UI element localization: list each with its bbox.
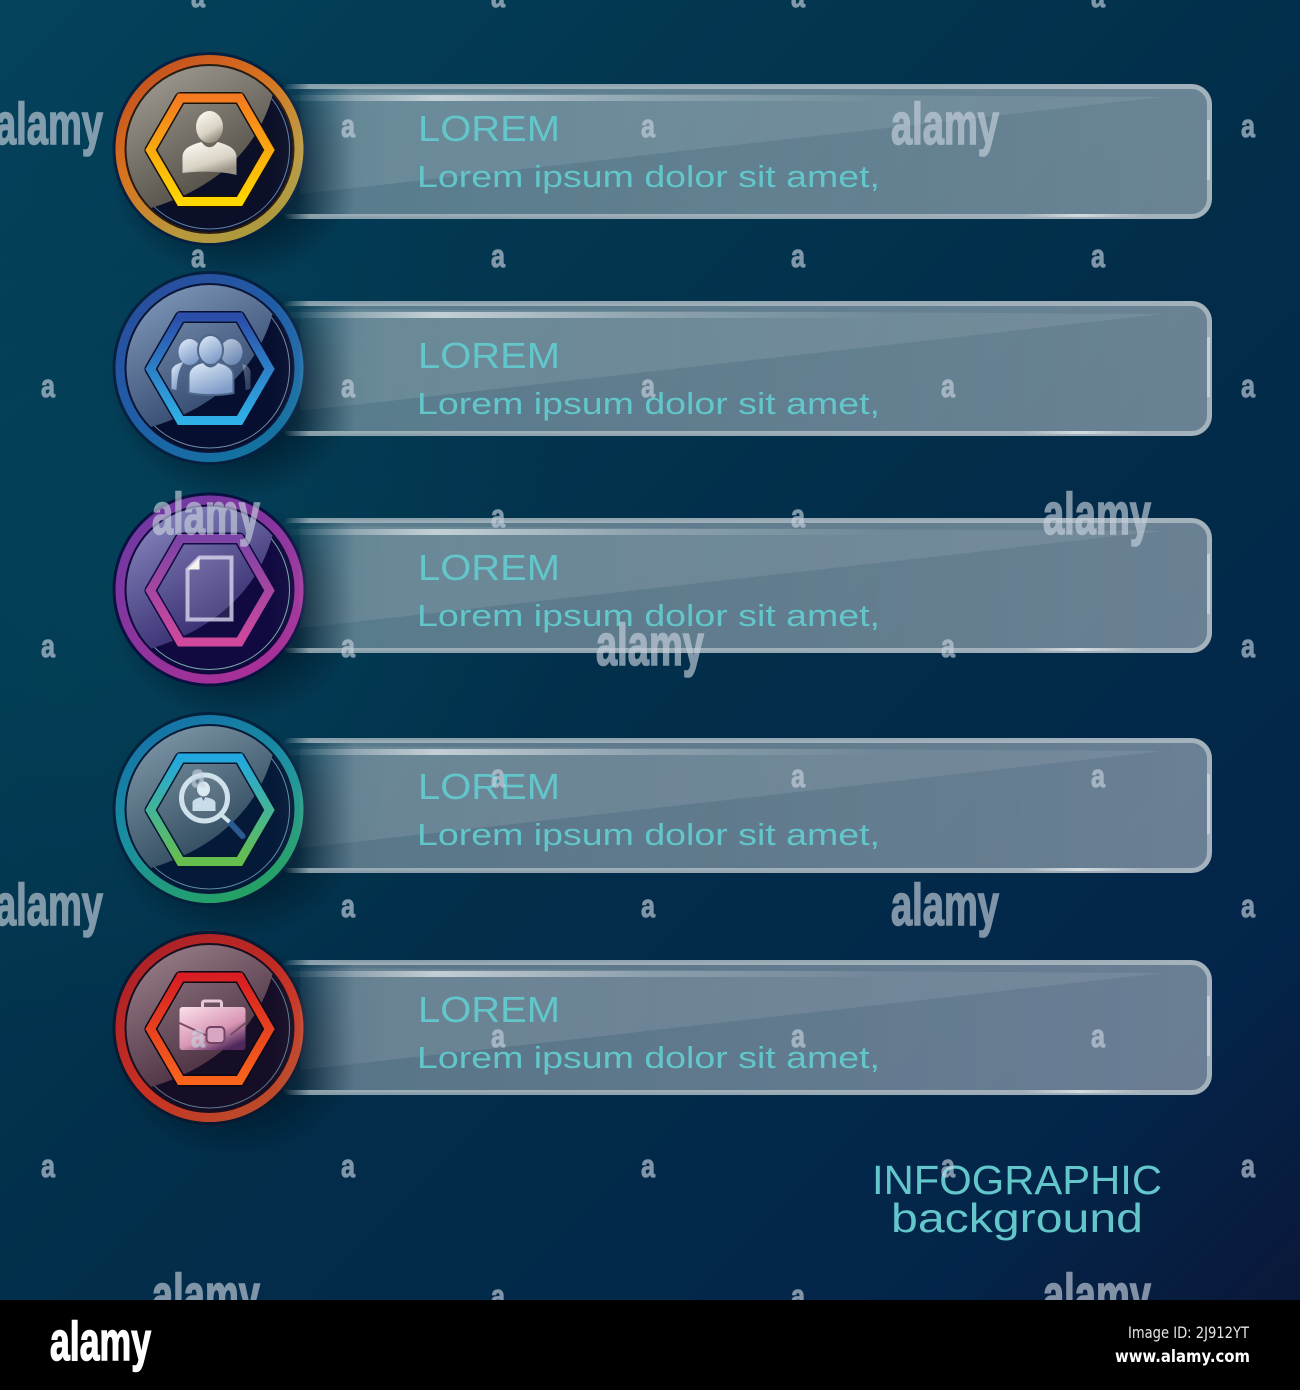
watermarks: a [341,1148,355,1184]
text 1: Lorem ipsum dolor sit amet, [417,159,880,194]
watermarks: a [341,368,355,404]
text 4: Lorem ipsum dolor sit amet, [417,817,880,852]
watermarks: alamy [152,482,260,547]
panel 4 [270,740,1210,871]
heading 3: LOREM [418,547,560,588]
image id: Image ID: 2J912YT [1128,1323,1249,1342]
heading 1: LOREM [418,108,560,149]
watermarks: a [791,1278,805,1314]
watermarks: a [491,1018,505,1054]
panel 3 [270,520,1210,651]
watermarks: a [641,1148,655,1184]
watermarks: a [641,888,655,924]
watermarks: alamy [891,873,999,938]
text 3: Lorem ipsum dolor sit amet, [417,598,880,633]
watermarks: a [641,368,655,404]
panel 2 [270,304,1210,434]
watermarks: a [941,368,955,404]
watermarks: alamy [596,613,704,678]
watermarks: a [191,758,205,794]
badge: document icon [112,492,306,686]
watermarks: a [491,1278,505,1314]
watermarks: a [1241,108,1255,144]
row 2: group [110,271,1210,499]
watermarks: a [791,498,805,534]
watermarks: a [1091,238,1105,274]
watermarks: a [791,238,805,274]
badge: group icon [112,271,306,465]
panel 1 [270,86,1210,217]
watermarks: a [341,628,355,664]
watermarks: a [491,498,505,534]
watermarks: alamy [1043,482,1151,547]
row 4: search user [110,712,1210,940]
watermarks: a [941,1148,955,1184]
badge: briefcase icon [112,931,306,1125]
watermarks: a [41,368,55,404]
watermarks: a [191,238,205,274]
watermarks: a [941,628,955,664]
watermarks: a [641,108,655,144]
title [872,1157,1162,1241]
row 5: briefcase [110,931,1210,1160]
row 3: document [110,492,1210,720]
heading 4: LOREM [418,766,560,807]
text 2: Lorem ipsum dolor sit amet, [417,386,880,421]
watermarks: a [1091,1018,1105,1054]
watermarks: alamy [891,92,999,157]
row 1: person [110,52,1210,280]
footer url: www.alamy.com [1115,1347,1250,1367]
watermarks: a [1091,758,1105,794]
watermarks: a [491,758,505,794]
watermarks: a [191,1018,205,1054]
watermarks: alamy [1043,1263,1151,1328]
watermarks: a [491,238,505,274]
watermarks: a [41,628,55,664]
watermarks: a [791,1018,805,1054]
watermarks: alamy [152,1263,260,1328]
panel 5 [270,962,1210,1093]
heading 2: LOREM [418,335,560,376]
text 5: Lorem ipsum dolor sit amet, [417,1040,880,1075]
watermarks: a [41,1148,55,1184]
heading 5: LOREM [418,989,560,1030]
watermarks: a [341,888,355,924]
badge: magnifier icon [112,712,306,906]
watermarks: a [1241,368,1255,404]
footer logo: alamy [50,1310,151,1372]
watermarks: a [791,758,805,794]
watermarks: a [1241,628,1255,664]
title: background [891,1195,1143,1241]
title: INFOGRAPHIC [872,1157,1162,1203]
watermarks: a [341,108,355,144]
badge: person icon [112,52,306,246]
footer bar [0,1300,1300,1390]
watermarks: a [1241,1148,1255,1184]
watermarks: a [1241,888,1255,924]
